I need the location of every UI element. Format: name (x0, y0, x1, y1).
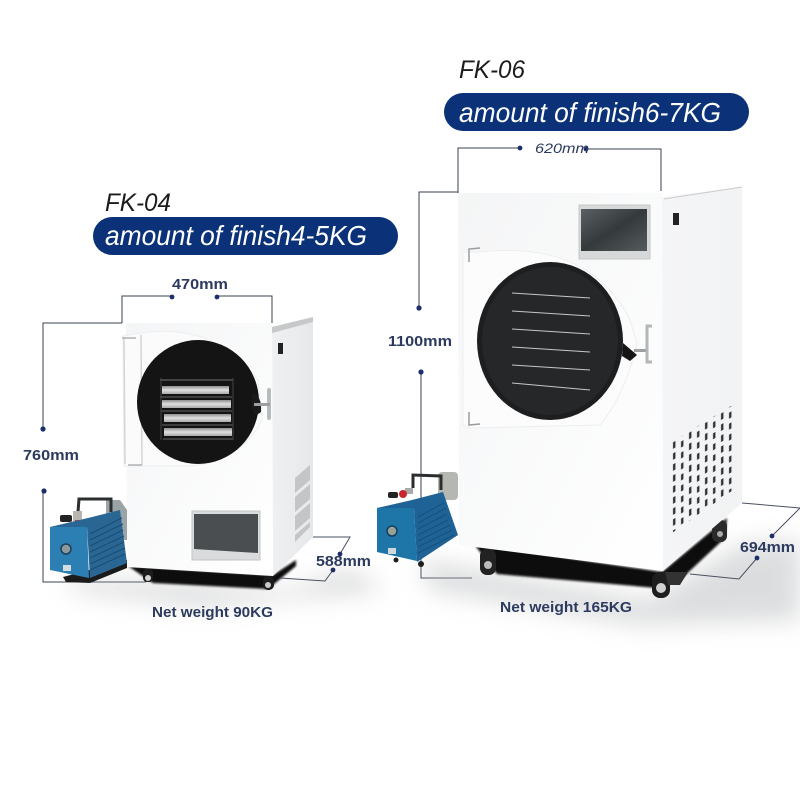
door handle (252, 388, 271, 420)
dimension: FK-04 height 760mm (23, 323, 146, 582)
door glass (123, 331, 262, 466)
control screen (192, 511, 260, 560)
casters (480, 520, 727, 598)
dimension: FK-04 width 470mm: 470mm (172, 276, 228, 293)
casters (143, 569, 274, 590)
pill: FK-06 capacity: amount of finish6-7KG (459, 97, 721, 128)
dimension: FK-06 depth 694mm: 694mm (740, 539, 795, 556)
front face (377, 508, 417, 561)
side panel (272, 317, 313, 576)
door glass (463, 250, 637, 428)
door hinges (469, 248, 480, 425)
floor shadow (70, 570, 385, 606)
chamber window (477, 262, 623, 420)
motor (438, 472, 458, 500)
top fittings (60, 515, 72, 522)
base (63, 560, 127, 583)
pill: FK-04 capacity: amount of finish4-5KG (105, 220, 367, 251)
cooling fins (90, 518, 125, 570)
motor (106, 500, 127, 540)
carry handle (78, 499, 111, 512)
base feet (394, 558, 398, 562)
shelves (512, 293, 590, 390)
control screen (579, 205, 650, 259)
icon: FK-04 vacuum pump (50, 499, 127, 583)
dimension: FK-06 height 1100mm (388, 192, 472, 578)
side vents (295, 465, 310, 542)
dimension: FK-04 depth 588mm (280, 537, 371, 581)
dimension: FK-06 depth 694mm (690, 503, 800, 579)
shelves (160, 378, 233, 440)
dimension: FK-06 width 620mm (458, 140, 661, 193)
undercarriage shadow (128, 560, 296, 589)
machine: FK-04 freeze dryer (70, 317, 385, 606)
dimension: FK-04 height 760mm: 760mm (23, 447, 79, 464)
label: FK-04 net weight: Net weight 90KG (152, 605, 273, 621)
front panel (458, 193, 663, 571)
chamber window (137, 340, 259, 464)
door handle (622, 326, 652, 362)
label: FK-06 net weight: Net weight 165KG (500, 600, 632, 616)
body top and side (50, 510, 127, 578)
side vents (672, 403, 736, 533)
door hinge bar (122, 335, 142, 465)
side switch (673, 213, 679, 225)
carry handle (413, 475, 441, 490)
front face (50, 527, 89, 578)
top fittings (388, 492, 398, 498)
undercarriage shadow (474, 518, 727, 588)
icon: FK-06 vacuum pump (377, 472, 458, 567)
machine: FK-06 freeze dryer (420, 187, 800, 625)
dimension: FK-06 height 1100mm: 1100mm (388, 333, 452, 350)
front panel (126, 323, 273, 576)
dimension: FK-06 width 620mm: 620mm (535, 140, 589, 156)
title: FK-04 model: FK-04 (105, 189, 171, 217)
dimension: FK-04 depth 588mm: 588mm (316, 553, 371, 570)
body top and side (377, 492, 458, 562)
side switch (278, 343, 283, 354)
side panel (662, 187, 742, 571)
floor shadow (420, 540, 800, 625)
cooling fins (418, 503, 454, 553)
dimension: FK-04 width 470mm (122, 276, 272, 323)
title: FK-06 model: FK-06 (459, 56, 525, 84)
